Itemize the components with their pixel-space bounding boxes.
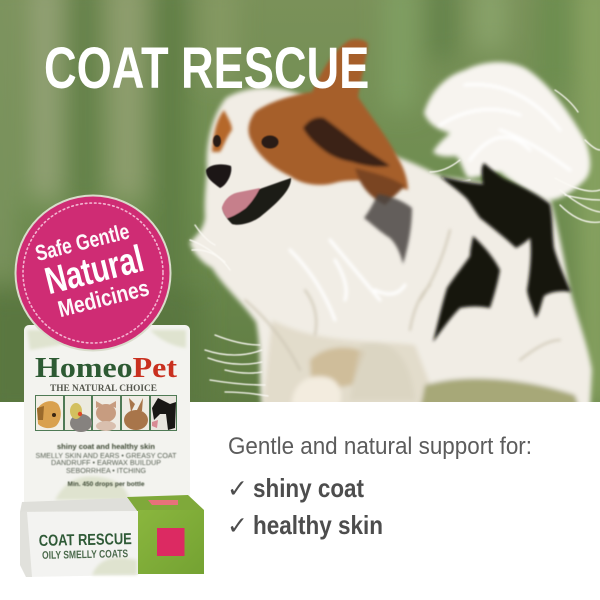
tagline: THE NATURAL CHOICE: [50, 384, 157, 394]
badge text: Natural: [41, 238, 148, 303]
benefit: shiny coat: shiny coat: [253, 473, 364, 503]
dog body: [190, 88, 592, 410]
product description: SMELLY SKIN AND EARS • GREASY COAT: [36, 453, 177, 460]
badge: safe gentle natural medicines: [14, 194, 172, 352]
badge text: Safe Gentle: [33, 218, 132, 266]
product description: [36, 442, 177, 488]
box label: [39, 531, 132, 562]
dog tail: [424, 62, 590, 200]
box label: OILY SMELLY COATS: [42, 548, 128, 562]
text block: support heading: Gentle and natural support for:: [228, 433, 532, 460]
icon: rabbit: [122, 396, 149, 430]
pink colour square: [157, 528, 184, 556]
badge text: [33, 217, 153, 324]
benefit: shiny coat: ✓: [227, 475, 248, 503]
icon: cockatiel: [65, 396, 92, 432]
dog brown head markings: [212, 39, 408, 205]
brand logo: Homeo Pet: [35, 352, 177, 384]
product description: DANDRUFF • EARWAX BUILDUP: [51, 460, 161, 467]
dog fur wisps: [190, 90, 600, 396]
dog face features: [206, 135, 291, 225]
product description: shiny coat and healthy skin: [57, 442, 155, 451]
benefit: healthy skin: healthy skin: [253, 510, 383, 540]
panel: product box: [20, 495, 204, 577]
product description: SEBORRHEA • ITCHING: [66, 468, 146, 475]
panel: product backing card: [24, 325, 190, 515]
animal photo strip: [35, 395, 177, 432]
box label: COAT RESCUE: [39, 531, 132, 550]
icon: kitten: [93, 396, 120, 431]
panel: dog photo: [0, 0, 600, 420]
dog black coat patches: [364, 163, 571, 342]
title: COAT RESCUE: [44, 37, 369, 101]
benefit: healthy skin: ✓: [227, 512, 248, 540]
product description: Min. 450 drops per bottle: [68, 481, 145, 488]
badge text: Medicines: [55, 274, 152, 322]
icon: black and white dog: [151, 396, 176, 430]
icon: puppy: [36, 396, 63, 430]
dog fur strokes: [245, 85, 570, 370]
